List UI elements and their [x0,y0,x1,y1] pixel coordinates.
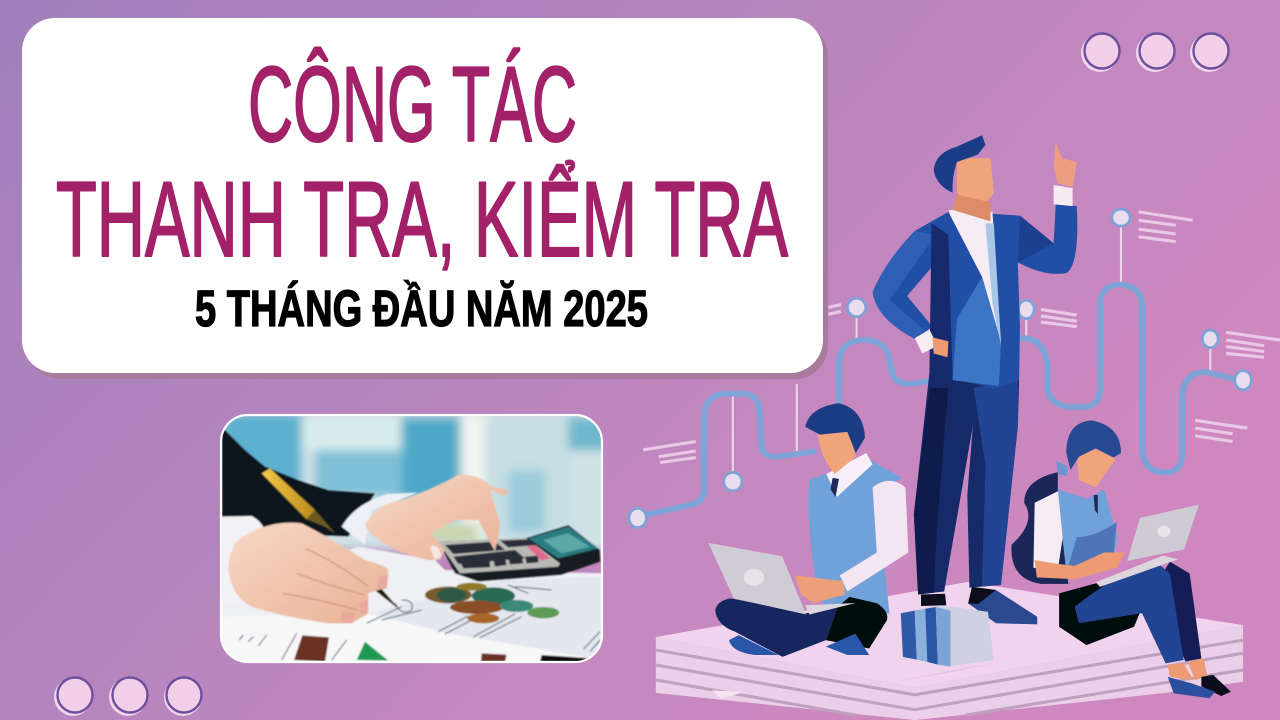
white cuffs [342,493,418,545]
standing man in blue suit [873,135,1077,624]
lower left hand holding pen [228,523,388,623]
illustration: team of three on a platform with circuit lines [629,135,1280,720]
circuit lines and nodes [629,209,1280,528]
coins [425,583,559,623]
bag on the platform [901,605,994,667]
photo: hands with pen and calculator over financial papers [215,410,610,670]
decorative dots bottom left [54,678,202,716]
subtitle: 5 THÁNG ĐẦU NĂM 2025 [195,279,648,337]
panel [22,18,823,373]
platform [656,582,1243,720]
title line 1: CÔNG TÁC [248,44,577,164]
blurred office backdrop [215,410,610,550]
seated man with laptop [708,403,908,657]
title line 2: THANH TRA, KIỂM TRA [56,159,788,279]
title panel [22,18,828,379]
sleeve [222,427,375,537]
paper sheets [222,546,601,661]
calculator [438,525,600,582]
seated woman with laptop [1011,420,1231,698]
decorative dots top right [1081,34,1228,72]
pen [262,468,400,610]
photo border [221,415,602,662]
panel shadow [27,23,828,379]
upper right hand [365,475,508,560]
